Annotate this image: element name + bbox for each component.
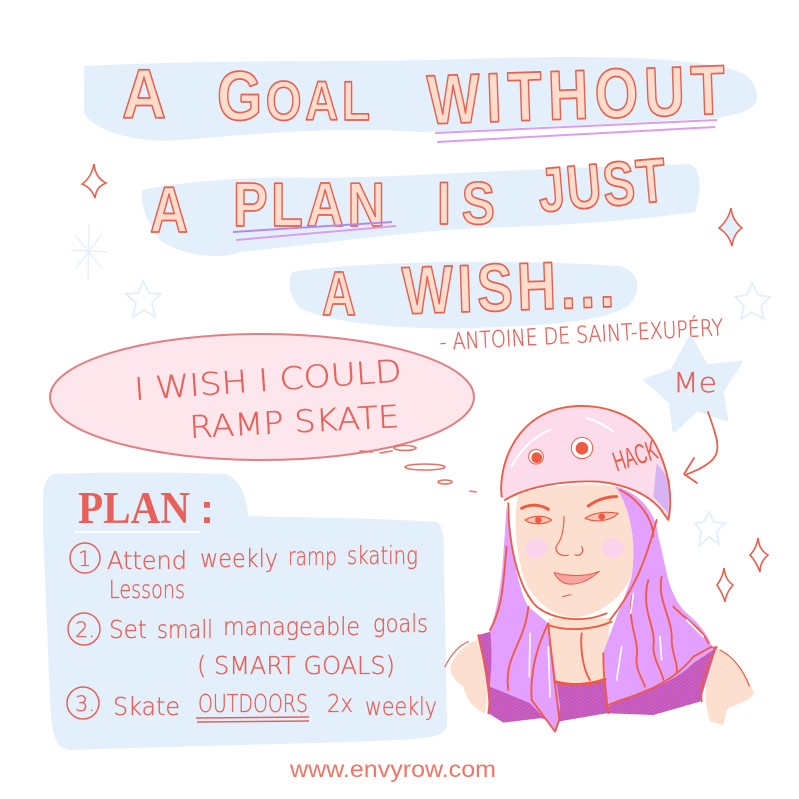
plan item 1: 1 bbox=[78, 547, 91, 571]
title line 1: GOAL bbox=[217, 57, 370, 135]
plan item 2: 2. bbox=[75, 618, 95, 642]
portrait bbox=[445, 406, 754, 732]
thought bubble bbox=[50, 334, 474, 460]
face bbox=[516, 484, 633, 617]
plan colon: : bbox=[200, 485, 214, 532]
title line 2 bbox=[150, 145, 669, 247]
title underlines bbox=[233, 120, 717, 240]
plan item 1 bbox=[70, 541, 418, 604]
neck bbox=[548, 618, 610, 683]
star: me label bbox=[645, 337, 741, 431]
hair highlights bbox=[529, 593, 703, 697]
me text: Me bbox=[673, 366, 717, 399]
thought trail bbox=[360, 446, 476, 492]
title line 1: WITHOUT bbox=[426, 52, 727, 139]
helmet lettering: HACK bbox=[609, 434, 661, 477]
plan item 1: Lessons bbox=[109, 575, 185, 604]
panel: plan bbox=[43, 472, 447, 750]
plan item 2 bbox=[68, 609, 428, 680]
decorative sparkles bbox=[82, 164, 768, 602]
decorative stars bbox=[71, 224, 770, 546]
plan item 1: Attend bbox=[107, 546, 187, 575]
plan item 2: goals bbox=[373, 609, 428, 638]
plan item 3: OUTDOORS bbox=[198, 689, 308, 718]
plan heading: PLAN bbox=[78, 483, 190, 533]
title line 2: JUST bbox=[535, 145, 669, 225]
plan item 1: ramp bbox=[288, 542, 337, 571]
title line 2: A bbox=[150, 175, 188, 247]
shirt bbox=[478, 630, 717, 723]
plan item 1: weekly bbox=[200, 544, 278, 573]
plan item 2: ( SMART GOALS) bbox=[197, 651, 395, 680]
hair bbox=[490, 487, 713, 732]
plan item 2: small bbox=[157, 615, 213, 644]
plan item 1: skating bbox=[347, 541, 418, 570]
helmet details bbox=[512, 418, 670, 513]
plan item 2: Set bbox=[109, 615, 147, 644]
title line 1 bbox=[122, 52, 727, 139]
title line 2: PLAN bbox=[233, 171, 385, 240]
website: www.envyrow.com bbox=[289, 756, 496, 782]
bubble text: RAMP SKATE bbox=[189, 399, 400, 446]
plan heading underline bbox=[75, 531, 200, 533]
title line 2: IS bbox=[437, 170, 495, 237]
plan item 2: manageable bbox=[223, 612, 360, 641]
title background bands bbox=[84, 57, 757, 328]
title bbox=[122, 52, 727, 328]
helmet bbox=[501, 406, 670, 520]
plan item 3: weekly bbox=[365, 692, 437, 721]
title line 3: A bbox=[322, 259, 356, 328]
bubble text: I WISH I COULD bbox=[133, 353, 403, 408]
bubble text bbox=[133, 353, 403, 446]
plan item 3: Skate bbox=[113, 692, 180, 721]
line work bbox=[445, 406, 749, 732]
arrow bbox=[684, 412, 717, 483]
plan item 3: 2x bbox=[327, 689, 353, 718]
attribution: - ANTOINE DE SAINT-EXUPÉRY bbox=[439, 313, 724, 356]
title line 1: A bbox=[122, 56, 166, 133]
cheeks bbox=[525, 538, 624, 558]
arms bbox=[450, 640, 754, 725]
plan item 3 bbox=[67, 687, 437, 722]
plan item 3: 3. bbox=[75, 692, 95, 716]
title line 3: WISH... bbox=[401, 246, 615, 328]
